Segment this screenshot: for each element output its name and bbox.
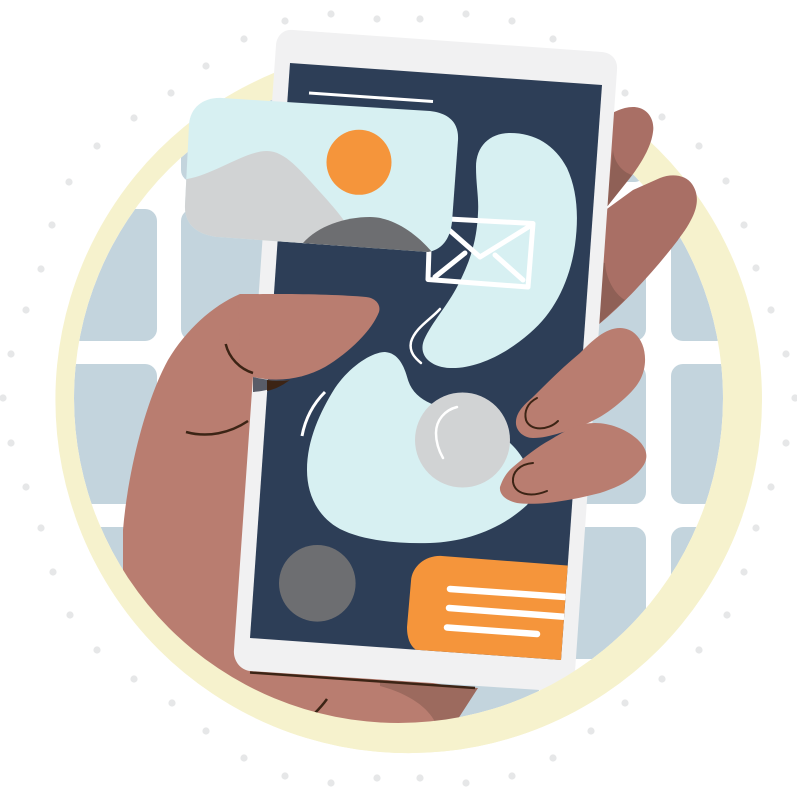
kidney blob: [422, 133, 577, 368]
back finger two: [598, 175, 697, 325]
nail four: [513, 463, 547, 494]
left highlight arc: [302, 392, 325, 436]
sun: [326, 130, 392, 195]
image card: [185, 98, 458, 252]
orange message card: [407, 556, 568, 660]
back finger one: [600, 107, 653, 208]
squiggle line: [411, 309, 440, 363]
thumb shadow dark: [267, 380, 290, 391]
lower blob: [307, 352, 531, 543]
grey sphere: [415, 392, 510, 488]
thumb joint crease: [226, 344, 253, 373]
mountains: [185, 151, 432, 252]
thumb: [186, 294, 379, 435]
palm crease: [186, 421, 248, 435]
yellow ring: [55, 46, 762, 753]
front finger four: [500, 423, 646, 504]
status line: [309, 93, 433, 102]
nail three: [525, 398, 558, 428]
message lines: [447, 589, 580, 634]
finger two shadow: [598, 262, 625, 325]
sphere highlight: [436, 407, 457, 458]
hand edge line below phone: [250, 672, 475, 688]
wrist crease: [314, 699, 327, 714]
ring overlap at bottom: [74, 515, 743, 754]
finger one shadow: [606, 150, 632, 208]
hand palm: [123, 294, 478, 735]
phone body: [234, 30, 617, 691]
grey circle button: [279, 545, 356, 622]
front finger three: [516, 328, 645, 438]
background tile grid: [74, 100, 723, 717]
phone screen: [250, 63, 602, 660]
thumb shadow: [253, 377, 290, 392]
palm shadow: [380, 680, 478, 722]
envelope: [428, 218, 533, 287]
